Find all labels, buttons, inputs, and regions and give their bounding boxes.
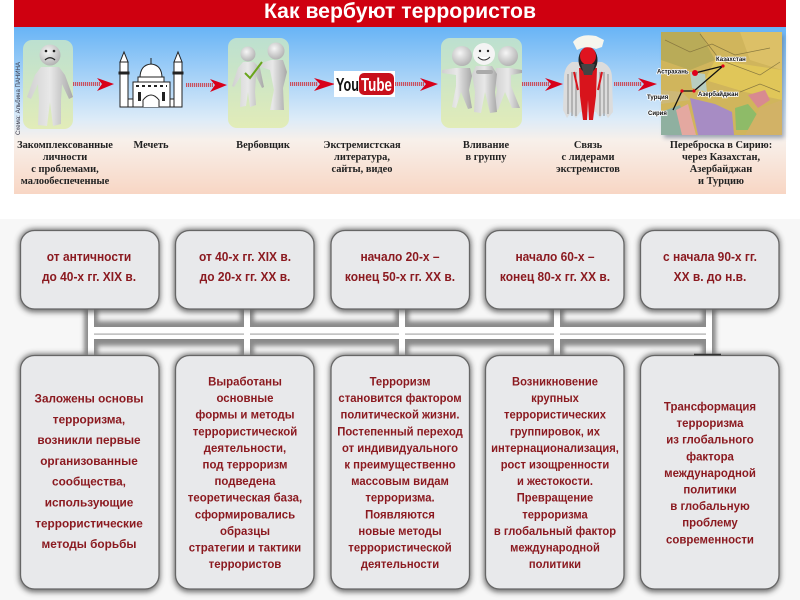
description 3: Терроризм — [370, 374, 430, 389]
step labels: Экстремистская — [323, 140, 401, 151]
description 3: террористической — [348, 540, 452, 555]
description 2: деятельности, — [204, 441, 286, 455]
period 4 — [486, 230, 624, 309]
map of route: Астрахань — [657, 70, 689, 76]
map of route: Казахстан — [716, 57, 746, 63]
icon: mosque — [119, 52, 183, 107]
icon: YouTube logo: You — [336, 75, 359, 95]
step labels: личности — [43, 152, 87, 163]
description 4: Превращение — [517, 491, 594, 505]
icon: YouTube logo — [334, 71, 395, 97]
description 4: терроризма — [522, 508, 588, 521]
description 3: терроризма. — [365, 490, 435, 505]
description 1: методы борьбы — [42, 537, 136, 551]
description 4 — [486, 356, 624, 589]
arrow 6 — [614, 78, 657, 91]
period 5: XX в. до н.в. — [674, 270, 746, 284]
description 4: международной — [510, 541, 600, 555]
description 2: под терроризм — [203, 457, 287, 472]
title banner: Как вербуют террористов — [264, 0, 536, 23]
period 4: начало 60-х – — [515, 250, 595, 264]
map of route: Азербайджан — [698, 91, 738, 98]
description 2: образцы — [220, 524, 270, 538]
map of route — [647, 32, 784, 138]
step labels: Переброска в Сирию: — [670, 140, 772, 151]
description 2: Выработаны — [208, 374, 282, 389]
description 3: новые методы — [358, 523, 442, 538]
description 5: политики — [683, 482, 737, 497]
description 4: крупных — [531, 392, 579, 405]
description 2: теоретическая база, — [188, 490, 302, 505]
period 3: конец 50-х гг. XX в. — [345, 270, 455, 284]
description 2: террористической — [193, 424, 297, 438]
description 2: террористов — [209, 557, 281, 571]
period 2: от 40-х гг. XIX в. — [199, 250, 291, 264]
step labels: Закомплексованные — [17, 140, 113, 151]
arrow 4 — [395, 78, 438, 91]
step labels: в группу — [466, 152, 507, 163]
lower section background — [0, 219, 800, 600]
description 2: формы и методы — [195, 407, 295, 422]
icon: recruiter — [228, 38, 289, 128]
description 5: международной — [664, 466, 756, 480]
map of route: Сирия — [648, 111, 667, 117]
description 2 — [176, 356, 314, 589]
description 4: террористических — [504, 408, 606, 422]
step labels: Вербовщик — [236, 140, 290, 151]
route lines — [673, 66, 723, 110]
description 5: из глобального — [666, 432, 754, 447]
description 1: сообщества, — [52, 474, 126, 489]
step labels: и Турцию — [698, 176, 744, 187]
description 3: Появляются — [365, 507, 435, 521]
period 1: от античности — [47, 250, 131, 264]
description 3: к преимущественно — [344, 457, 456, 472]
period 1: до 40-х гг. XIX в. — [42, 270, 136, 284]
description 4: Возникновение — [512, 375, 598, 389]
period 5: с начала 90-х гг. — [663, 250, 757, 264]
step labels: Связь — [574, 140, 603, 151]
description 5 — [640, 354, 779, 589]
description 5: Трансформация — [664, 399, 756, 414]
arrow 1 — [73, 78, 114, 91]
description 4: политики — [529, 558, 581, 571]
description 3: массовым видам — [351, 474, 449, 488]
description 3: Постепенный переход — [337, 424, 463, 438]
period 2: до 20-х гг. XX в. — [200, 270, 290, 284]
description 4: группировок, их — [510, 425, 600, 438]
arrow 2 — [186, 79, 227, 92]
timeline connectors — [84, 309, 716, 355]
description 1: Заложены основы — [35, 391, 143, 406]
description 3: становится фактором — [338, 391, 462, 405]
step labels: малообеспеченные — [21, 176, 110, 187]
period 5 — [640, 230, 779, 309]
icon: sad person — [23, 40, 73, 129]
description 5: терроризма — [677, 416, 744, 430]
description 1: использующие — [45, 495, 134, 510]
icon: group of people — [441, 38, 522, 128]
description 4: интернационализация, — [491, 441, 619, 455]
description 2: стратегии и тактики — [189, 540, 301, 555]
panel: recruitment process — [14, 27, 786, 194]
step labels: экстремистов — [556, 164, 620, 175]
period 4: конец 80-х гг. XX в. — [500, 270, 610, 284]
description 5: фактора — [686, 449, 734, 463]
description 5: в глобальную — [670, 499, 750, 513]
step labels: Мечеть — [133, 140, 169, 151]
step labels: Азербайджан — [690, 164, 752, 175]
description 1: терроризма, — [53, 412, 125, 426]
step labels: через Казахстан, — [682, 152, 760, 163]
step labels: с проблемами, — [31, 164, 99, 175]
description 4: в глобальный фактор — [494, 524, 616, 538]
step labels: сайты, видео — [332, 164, 392, 175]
description 4: рост изощренности — [501, 458, 609, 472]
description 1: возникли первые — [37, 433, 141, 447]
period 3: начало 20-х – — [360, 250, 440, 264]
period 2 — [176, 230, 314, 309]
box shadows — [19, 229, 780, 592]
description 1: террористические — [35, 516, 143, 530]
period 1 — [20, 230, 159, 309]
step labels: Вливание — [463, 140, 509, 151]
description 1: организованные — [40, 454, 138, 468]
description 3 — [331, 356, 470, 589]
description 2: основные — [216, 391, 274, 405]
description 3: от индивидуального — [342, 440, 458, 455]
credit: Схема: Альбина ПАНИНА — [16, 62, 22, 135]
description 3: политической жизни. — [341, 407, 460, 422]
step labels — [17, 140, 772, 187]
description 3: деятельности — [361, 557, 439, 571]
map of route: Турция — [647, 95, 669, 101]
description 2: сформировались — [195, 507, 295, 521]
description 2: подведена — [214, 474, 276, 488]
arrow 5 — [522, 78, 563, 91]
step labels: с лидерами — [562, 152, 614, 163]
icon: YouTube logo: Tube — [361, 75, 392, 95]
description 1 — [20, 356, 159, 589]
icon: extremist leader — [563, 35, 613, 120]
description 4: и жестокости. — [517, 475, 593, 488]
description 5: современности — [666, 532, 754, 546]
description 5: проблему — [682, 515, 738, 530]
period 3 — [331, 230, 470, 309]
arrow 3 — [290, 78, 335, 91]
title banner — [14, 0, 786, 27]
step labels: литература, — [334, 152, 390, 163]
